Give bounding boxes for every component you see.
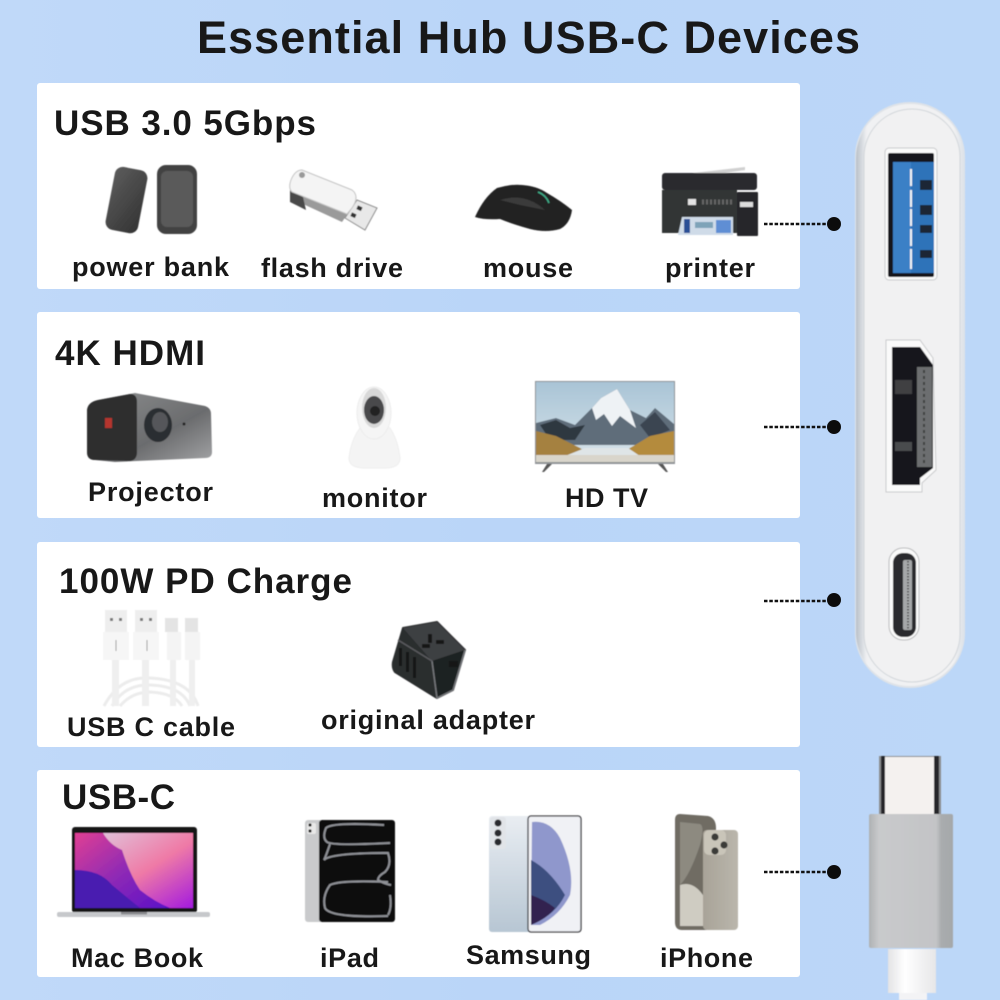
connector line: PD port: [764, 593, 841, 607]
connector line: HDMI port: [764, 420, 841, 434]
icon: flash drive: [290, 170, 377, 230]
panel: 100W PD Charge: [37, 542, 800, 747]
hub device: [855, 102, 965, 688]
icon: USB C cable: [103, 610, 200, 706]
USB-C plug: [869, 756, 953, 1000]
label: mouse: mouse: [483, 253, 573, 283]
heading: 4K HDMI: 4K HDMI: [55, 334, 205, 373]
label: Projector: Projector: [88, 477, 213, 507]
label: iPhone: iPhone: [660, 943, 753, 973]
label: HD TV: HD TV: [565, 483, 648, 513]
icon: Mac Book: [57, 827, 210, 917]
cable: [899, 993, 927, 1000]
strain relief: [888, 949, 936, 993]
label: flash drive: flash drive: [261, 253, 403, 283]
icon: Samsung: [489, 816, 581, 932]
panel: 4K HDMI: [37, 312, 800, 518]
connector line: USB-C plug: [764, 865, 841, 879]
label: USB C cable: USB C cable: [67, 712, 235, 742]
plug body: [869, 814, 953, 948]
connector line: USB 3.0 port: [764, 217, 841, 231]
label: power bank: power bank: [72, 252, 230, 282]
label: Mac Book: Mac Book: [71, 943, 204, 973]
panel: USB-C: [37, 770, 800, 977]
port: USB-C: [889, 548, 919, 640]
icon: monitor camera: [349, 387, 400, 468]
icon: power bank: [104, 165, 197, 235]
plug tip: [879, 756, 941, 814]
icon: iPad: [305, 820, 395, 922]
port: HDMI: [886, 340, 936, 492]
port: USB 3.0: [885, 148, 937, 280]
label: printer: printer: [665, 253, 755, 283]
panel: USB 3.0: [37, 83, 800, 289]
label: original adapter: original adapter: [321, 705, 535, 735]
heading: USB-C: USB-C: [62, 778, 175, 817]
icon: iPhone: [675, 814, 738, 930]
icon: projector: [87, 393, 212, 462]
label: monitor: monitor: [322, 483, 427, 513]
icon: printer: [662, 167, 758, 236]
heading: USB 3.0 5Gbps: USB 3.0 5Gbps: [54, 104, 316, 143]
icon: HD TV: [535, 381, 675, 472]
label: Samsung: Samsung: [466, 940, 591, 970]
heading: 100W PD Charge: 100W PD Charge: [59, 562, 352, 601]
label: iPad: iPad: [320, 943, 379, 973]
icon: original adapter: [393, 622, 465, 698]
title: Essential Hub USB-C Devices: [197, 12, 860, 63]
icon: mouse: [475, 185, 572, 231]
